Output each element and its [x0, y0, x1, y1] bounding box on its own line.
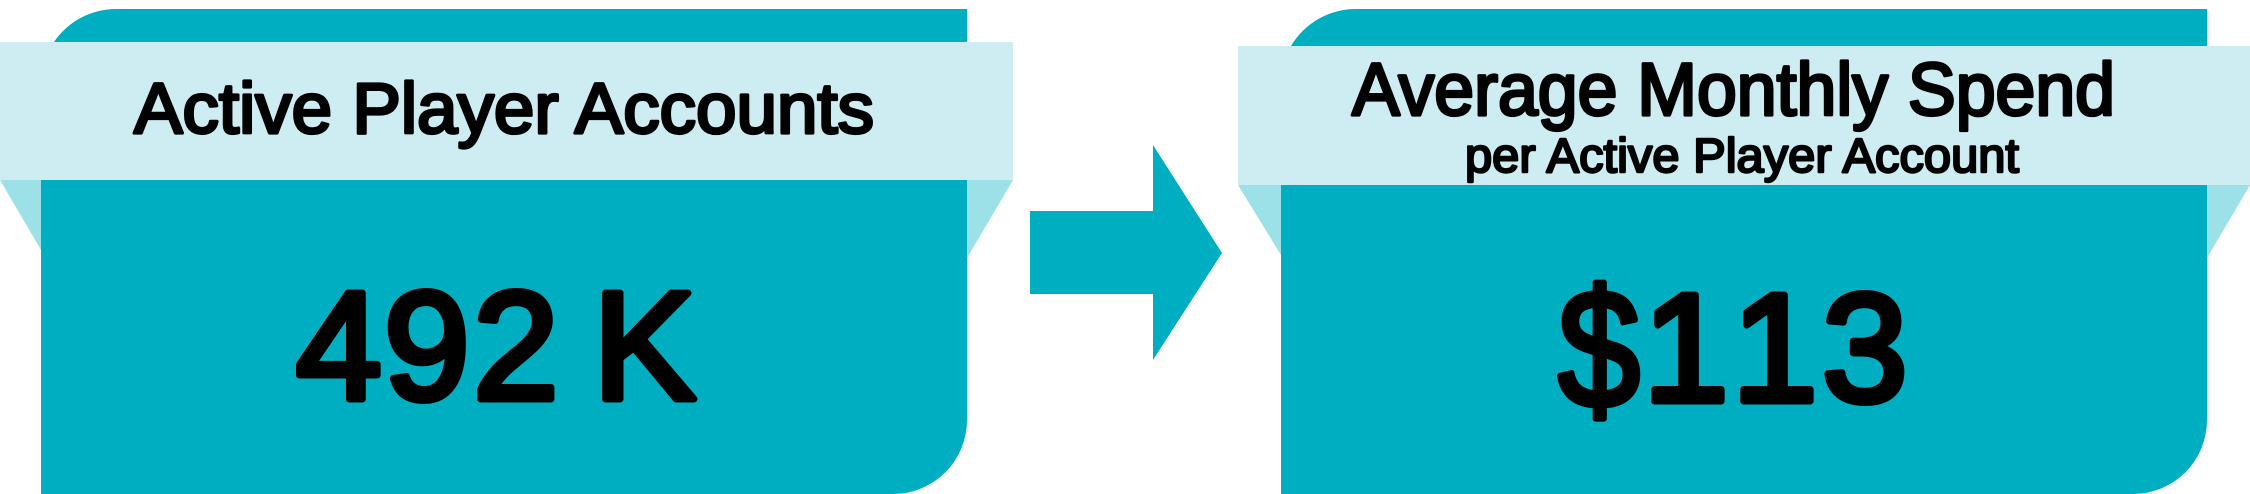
subheading: per Active Player Account: [1465, 130, 2019, 183]
value: [1558, 255, 1908, 443]
amount: 113: [1643, 262, 1908, 434]
value: 492 K: [296, 260, 696, 432]
header band: [1238, 46, 2250, 185]
arrow: [1030, 145, 1222, 360]
ribbon fold: right: [967, 180, 1013, 258]
panel: active player accounts: [0, 9, 1013, 494]
card background: [1281, 9, 2207, 494]
ribbon fold: left: [1238, 185, 1281, 255]
header band: [0, 42, 1013, 180]
heading: Active Player Accounts: [134, 70, 874, 149]
panel: average monthly spend: [1238, 9, 2250, 494]
dollar sign: $: [1558, 255, 1640, 443]
heading: Average Monthly Spend: [1352, 48, 2115, 131]
ribbon fold: right: [2207, 185, 2250, 258]
card background: [41, 9, 967, 494]
ribbon fold: left: [0, 180, 41, 250]
